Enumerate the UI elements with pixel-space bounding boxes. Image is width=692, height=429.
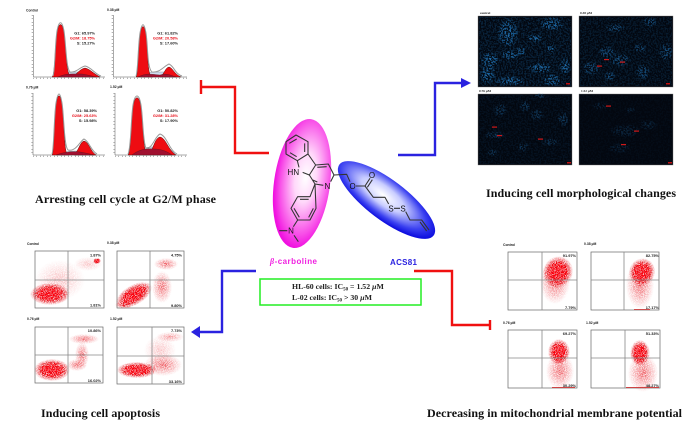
plot: 0.76 uM: 16.02% <box>88 378 102 383</box>
callout: IC50 values: µM <box>360 293 372 302</box>
histogram: control: Control <box>26 8 38 12</box>
molecule structure: O <box>350 182 356 191</box>
plot: 0.76 uM: 10.86% <box>88 328 102 333</box>
plot: 1.52 uM: 48.27% <box>646 383 660 388</box>
histogram: 0.38 uM: S: 17.60% <box>160 40 179 46</box>
plot: 0.76 uM: 30.29% <box>563 383 577 388</box>
arrow: inhibit mitochondrial potential <box>414 271 490 330</box>
plot: 1.52 uM: 7.73% <box>171 328 183 333</box>
image: 1.52 uM <box>579 89 673 165</box>
histogram: 0.76 uM: G2/M: 25.63% <box>72 113 98 118</box>
histogram: 0.38 uM: G1: 61.82% <box>157 30 179 36</box>
plot: 1.52 uM <box>586 321 660 392</box>
histogram: 1.52 uM: G1: 50.82% <box>157 108 179 113</box>
plot: control: Control <box>503 243 515 247</box>
panel: mitochondrial potential flow cytometry <box>503 242 660 392</box>
histogram: control <box>26 8 105 78</box>
histogram: 1.52 uM: 1.52 µM <box>110 85 122 89</box>
image: 0.76 uM: 0.76 µM <box>479 89 492 93</box>
molecule structure: N <box>288 227 294 236</box>
histogram: 0.76 uM: 0.76 µM <box>26 86 38 90</box>
plot: 1.52 uM: 33.16% <box>169 379 183 384</box>
histogram: control: G1: 65.97% <box>74 30 96 36</box>
histogram: 0.38 uM: G2/M: 20.58% <box>153 36 179 40</box>
molecule structure: O <box>369 171 375 180</box>
plot: control: 1.87% <box>90 252 102 258</box>
plot: 0.76 uM: 0.76 µM <box>503 321 515 325</box>
panel: cell cycle histograms <box>26 8 187 156</box>
plot: control: 91.97% <box>563 253 577 258</box>
histogram: 0.76 uM <box>26 86 105 156</box>
callout: IC50 values: 50 <box>343 288 349 292</box>
arrow: inhibit cell cycle <box>201 80 269 153</box>
plot: 0.76 uM <box>27 317 103 383</box>
plot: control <box>27 242 104 308</box>
callout: IC50 values: L-02 cells: IC <box>292 293 337 302</box>
arrows: cells <box>597 59 625 67</box>
plot: 1.52 uM <box>110 317 184 384</box>
image: 0.38 uM: 0.38 µM <box>580 11 593 15</box>
image: 0.76 uM <box>478 89 572 165</box>
histogram: 1.52 uM: S: 17.90% <box>160 118 179 123</box>
arrows: cells <box>492 126 543 140</box>
plot: control: 7.79% <box>565 305 577 310</box>
plot: 0.38 uM: 17.17% <box>646 305 660 310</box>
heading: cell cycle: Arresting cell cycle at G2/M phase <box>35 192 217 206</box>
label: ACS81: ACS81 <box>390 258 418 267</box>
callout: IC50 values: 50 <box>337 298 343 304</box>
plot: 0.38 uM: 82.75% <box>646 253 660 258</box>
molecule structure: S <box>388 204 394 213</box>
histogram: 0.76 uM: G1: 58.39% <box>76 108 98 113</box>
heading: mitochondrial membrane potential: Decreasing in mitochondrial membrane potential <box>427 406 683 420</box>
arrow: to apoptosis <box>191 271 256 338</box>
histogram: control: G2/M: 18.75% <box>70 36 96 40</box>
molecule structure <box>279 135 429 242</box>
arrows: cells <box>606 106 639 145</box>
ellipse: beta-carboline moiety <box>265 115 339 252</box>
histogram: control: S: 15.27% <box>77 40 96 46</box>
plot: 0.38 uM: 0.38 µM <box>107 241 119 245</box>
plot: 1.52 uM: 1.52 µM <box>586 321 598 325</box>
histogram: 0.76 uM: S: 15.98% <box>79 118 98 123</box>
plot: 0.38 uM <box>584 242 660 310</box>
panel: apoptosis flow cytometry <box>27 241 184 384</box>
callout: IC50 values: HL-60 cells: IC <box>292 282 343 291</box>
callout: IC50 values: > 30 <box>342 293 360 302</box>
plot: control: 1.81% <box>90 302 102 308</box>
image: 0.38 uM <box>579 11 673 87</box>
plot: control: Control <box>27 242 39 246</box>
plot: 0.76 uM <box>503 321 577 389</box>
plot: 0.76 uM: 0.76 µM <box>27 317 39 321</box>
plot: 1.52 uM: 1.52 µM <box>110 317 122 321</box>
arrow: to morphology <box>398 78 471 155</box>
callout: IC50 values: = 1.52 <box>348 282 372 291</box>
plot: 0.38 uM: 0.38 µM <box>584 242 596 246</box>
callout: IC50 values <box>260 279 421 305</box>
image: control: control <box>480 11 490 15</box>
heading: apoptosis: Inducing cell apoptosis <box>41 406 160 420</box>
plot: 0.38 uM <box>107 241 184 314</box>
image: control <box>478 11 572 87</box>
plot: 1.52 uM: 51.33% <box>646 331 660 336</box>
plot: 0.38 uM: 4.75% <box>171 252 183 258</box>
molecule structure: HN <box>288 168 299 177</box>
ellipse: ACS81 moiety <box>327 149 446 251</box>
callout: IC50 values: µM <box>372 282 384 291</box>
histogram: 1.52 uM: G2/M: 31.28% <box>153 113 179 118</box>
histogram: 0.38 uM: 0.38 µM <box>107 8 119 12</box>
histogram: 1.52 uM <box>110 85 187 156</box>
plot: 0.76 uM: 69.27% <box>563 331 577 336</box>
histogram: 0.38 uM <box>107 8 187 78</box>
image: 1.52 uM: 1.52 µM <box>581 89 594 93</box>
panel: fluorescence microscopy <box>478 11 673 165</box>
molecule structure: N <box>324 182 330 191</box>
plot: 0.38 uM: 9.80% <box>171 303 183 308</box>
heading: morphological changes: Inducing cell morphological changes <box>486 186 676 200</box>
label: beta-carboline: β-carboline <box>269 257 318 266</box>
molecule structure: S <box>400 204 406 213</box>
plot: control <box>503 243 578 310</box>
